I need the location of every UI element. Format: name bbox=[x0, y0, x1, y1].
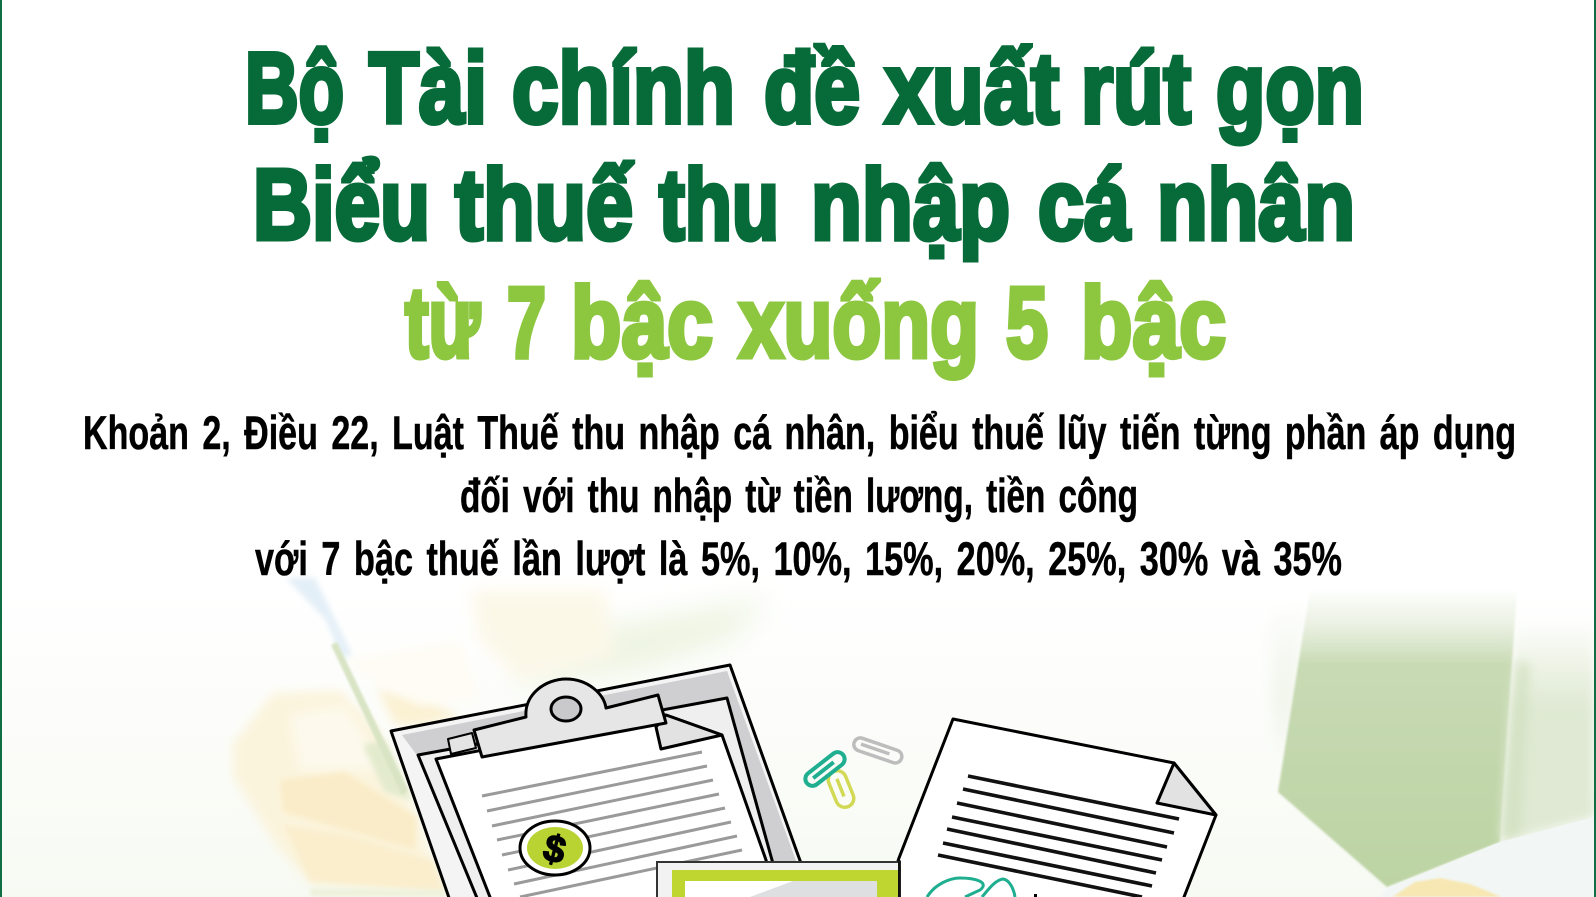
clip hole bbox=[551, 697, 581, 721]
title line 1: chính bbox=[512, 32, 735, 144]
description line 2: đối với thu nhập từ tiền lương, tiền công bbox=[460, 469, 1138, 522]
title line 3: xuống bbox=[739, 267, 979, 379]
frame lime mat bbox=[672, 870, 899, 897]
picture frame panel bbox=[657, 860, 900, 897]
title line 2: cá bbox=[1038, 149, 1130, 261]
title line 1: gọn bbox=[1216, 32, 1364, 144]
icon: document with signature bbox=[880, 719, 1216, 897]
frame outer bbox=[657, 862, 900, 897]
frame border right bbox=[1594, 0, 1596, 897]
back sheet bbox=[418, 698, 790, 897]
title line 1: Tài bbox=[369, 32, 487, 144]
sheet text lines bbox=[482, 752, 742, 897]
sheet folded corner bbox=[656, 715, 722, 749]
title line 1: Bộ bbox=[245, 32, 344, 144]
grey paper clip bbox=[852, 736, 904, 765]
small tab bbox=[448, 733, 476, 754]
frame right edge bbox=[898, 860, 900, 897]
front sheet bbox=[436, 715, 780, 897]
board grey band bbox=[402, 671, 815, 897]
signature dot bbox=[1034, 894, 1037, 897]
document sheet bbox=[880, 719, 1216, 897]
title line 1: xuất bbox=[885, 32, 1059, 144]
inner grey diagonal bbox=[750, 881, 877, 897]
frame border left bbox=[0, 0, 2, 897]
background photo: hand writing on paper bbox=[0, 578, 1596, 897]
metal clip bbox=[474, 679, 666, 757]
description text bbox=[83, 406, 1516, 585]
icon: dollar coin bbox=[520, 821, 590, 875]
signature bbox=[927, 878, 1015, 897]
title line 3: 7 bbox=[507, 267, 546, 379]
title line 3 bbox=[405, 267, 1226, 379]
title line 2: nhân bbox=[1157, 149, 1355, 261]
clipboard board bbox=[391, 665, 820, 897]
title line 1: rút bbox=[1081, 32, 1191, 144]
title line 1: đề bbox=[764, 32, 860, 144]
icon: clipboard bbox=[391, 665, 820, 897]
frame inner bbox=[685, 881, 877, 897]
title line 2: nhập bbox=[811, 149, 1010, 261]
title line 3: 5 bbox=[1006, 267, 1048, 379]
title line 2: thuế bbox=[455, 149, 633, 261]
title line 1 bbox=[245, 32, 1364, 144]
title line 2 bbox=[253, 149, 1355, 261]
title bbox=[245, 32, 1364, 379]
title line 2: Biểu bbox=[253, 149, 430, 261]
icon: paper clips bbox=[803, 736, 904, 810]
document fold bbox=[1157, 763, 1216, 815]
yellow paper clip bbox=[826, 768, 856, 810]
teal paper clip bbox=[803, 749, 847, 789]
title line 3: bậc bbox=[571, 267, 713, 379]
icon: dollar coin: $ bbox=[539, 827, 570, 873]
title line 3: từ bbox=[405, 267, 480, 379]
title line 3: bậc bbox=[1081, 267, 1226, 379]
title line 2: thu bbox=[659, 149, 779, 261]
document text lines bbox=[938, 776, 1179, 897]
